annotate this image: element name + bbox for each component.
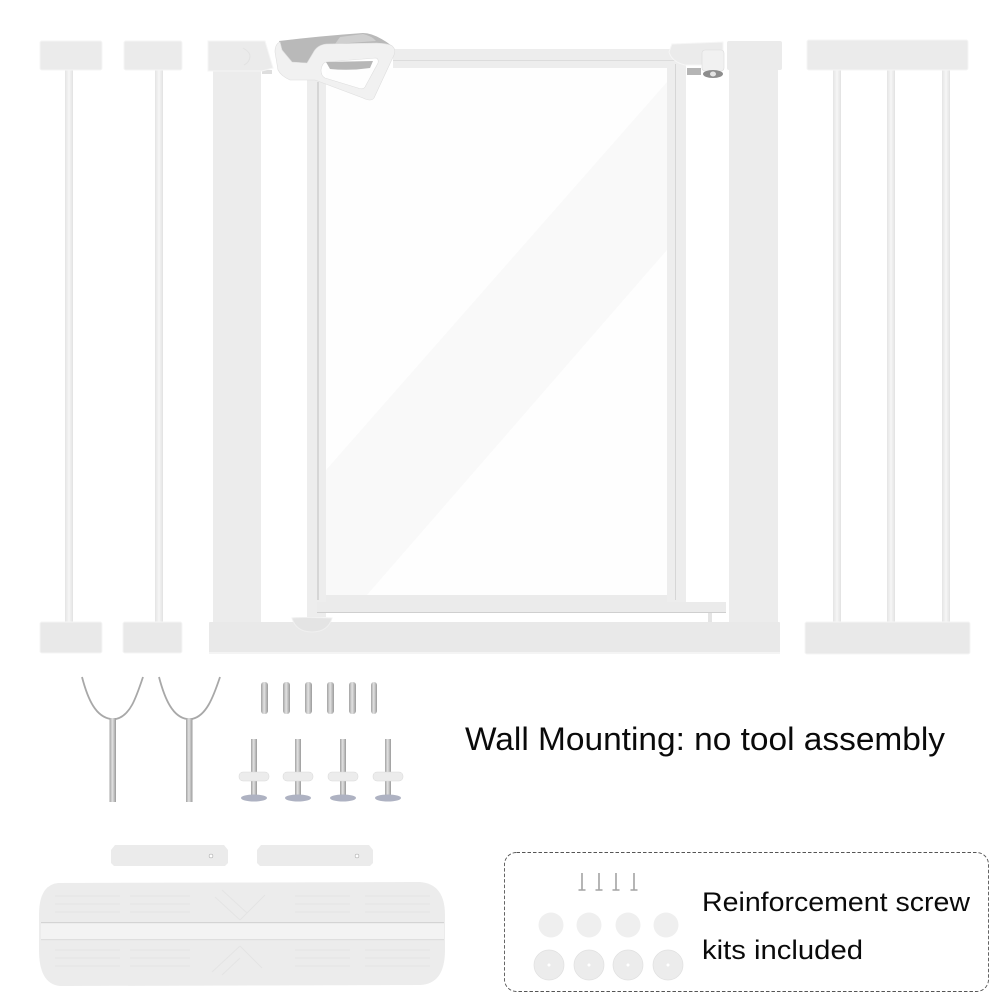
gate frame posts and base	[208, 41, 782, 654]
panel: reinforcement screw kit	[504, 852, 988, 992]
screws	[578, 873, 638, 890]
extension piece: narrow left	[40, 41, 102, 653]
caption line one: Reinforcement screw	[702, 887, 971, 917]
pad holes	[548, 964, 670, 966]
gate handle	[275, 33, 395, 100]
small cover caps	[538, 912, 678, 938]
gate hinge	[669, 42, 724, 78]
locating pins	[261, 682, 377, 714]
pressure mount bolts	[239, 739, 403, 802]
extension piece: narrow second	[123, 41, 182, 653]
extension piece: wide right	[805, 40, 970, 654]
y-shaped mounting hooks	[82, 677, 220, 802]
large round pads	[534, 950, 683, 980]
caption line two: kits included	[702, 935, 863, 965]
caption: wall mounting: Wall Mounting: no tool assembly	[465, 721, 945, 757]
wall brackets	[111, 845, 373, 866]
transparent gate panel	[292, 49, 726, 632]
wall pad plate	[39, 882, 445, 986]
